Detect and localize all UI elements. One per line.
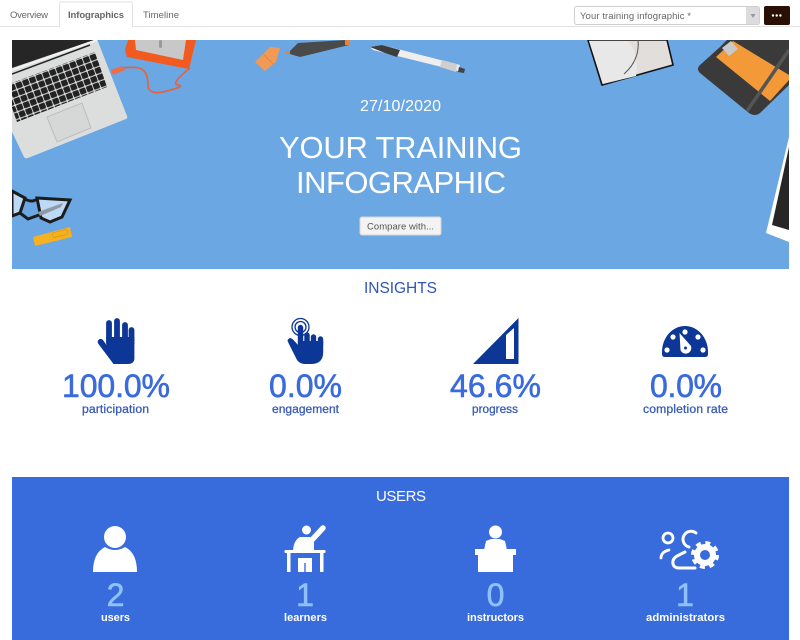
compare button xyxy=(360,217,441,235)
icon: learner at desk xyxy=(284,526,326,572)
metric: participation: participation xyxy=(82,402,149,416)
metric: completion rate: completion rate xyxy=(643,402,728,416)
hero banner xyxy=(12,39,789,269)
infographic selector: Your training infographic * xyxy=(580,11,691,22)
tab: timeline: Timeline xyxy=(143,10,179,21)
illustration: closed notebook xyxy=(588,40,673,85)
navigation tabs xyxy=(0,2,800,27)
menu button xyxy=(764,6,790,25)
metric: users: users xyxy=(101,612,130,624)
hero title: YOUR TRAINING xyxy=(279,130,522,165)
illustration: highlighter and cap xyxy=(255,40,350,71)
users heading: USERS xyxy=(376,488,426,505)
metric: participation xyxy=(62,321,170,416)
hero desk illustrations xyxy=(12,39,789,246)
metric: participation: 100.0% xyxy=(62,368,170,404)
icon: user silhouette xyxy=(93,526,137,572)
icon: gauge xyxy=(662,326,708,357)
metric: completion rate: 0.0% xyxy=(650,368,722,404)
illustration: laptop xyxy=(12,39,127,158)
hero title xyxy=(279,130,522,200)
metric: learners: 1 xyxy=(296,577,314,613)
illustration: yellow usb clip xyxy=(33,227,72,246)
illustration: orange hard drive with cable xyxy=(111,40,196,93)
tab: infographics active xyxy=(60,2,132,27)
icon: raised hand xyxy=(98,321,134,364)
metric: instructors xyxy=(467,526,524,624)
metric: progress: progress xyxy=(472,402,518,416)
icon: tapping hand xyxy=(288,318,323,364)
metric: administrators: administrators xyxy=(646,612,725,624)
insights section xyxy=(62,280,728,416)
illustration: glasses xyxy=(12,191,70,222)
metric: administrators: 1 xyxy=(676,577,694,613)
tab: overview: Overview xyxy=(10,10,48,21)
tab: infographics active: Infographics xyxy=(68,10,124,21)
metric: completion rate xyxy=(643,326,728,416)
illustration: tablet xyxy=(766,137,789,242)
metric: learners xyxy=(284,526,327,624)
metric: progress: 46.6% xyxy=(450,368,541,404)
metric: instructors: instructors xyxy=(467,612,524,624)
metric: learners: learners xyxy=(284,612,327,624)
icon: progress triangle xyxy=(473,318,518,364)
infographic selector xyxy=(574,6,760,24)
metric: instructors: 0 xyxy=(487,577,504,613)
metric: users: 2 xyxy=(107,577,124,613)
hero date: 27/10/2020 xyxy=(360,98,441,115)
icon: admins with gear xyxy=(661,531,717,568)
metric: engagement xyxy=(269,318,342,416)
users section xyxy=(12,477,789,640)
metric: engagement: 0.0% xyxy=(269,368,342,404)
insights heading: INSIGHTS xyxy=(364,280,437,297)
metric: users xyxy=(93,526,137,624)
metric: administrators xyxy=(646,531,725,624)
illustration: orange planner xyxy=(698,40,789,115)
icon: instructor at lectern xyxy=(475,526,516,572)
hero title: INFOGRAPHIC xyxy=(296,165,506,200)
compare button: Compare with... xyxy=(367,222,434,232)
metric: engagement: engagement xyxy=(272,402,340,416)
metric: progress xyxy=(450,318,541,416)
illustration: white pen xyxy=(370,45,465,73)
